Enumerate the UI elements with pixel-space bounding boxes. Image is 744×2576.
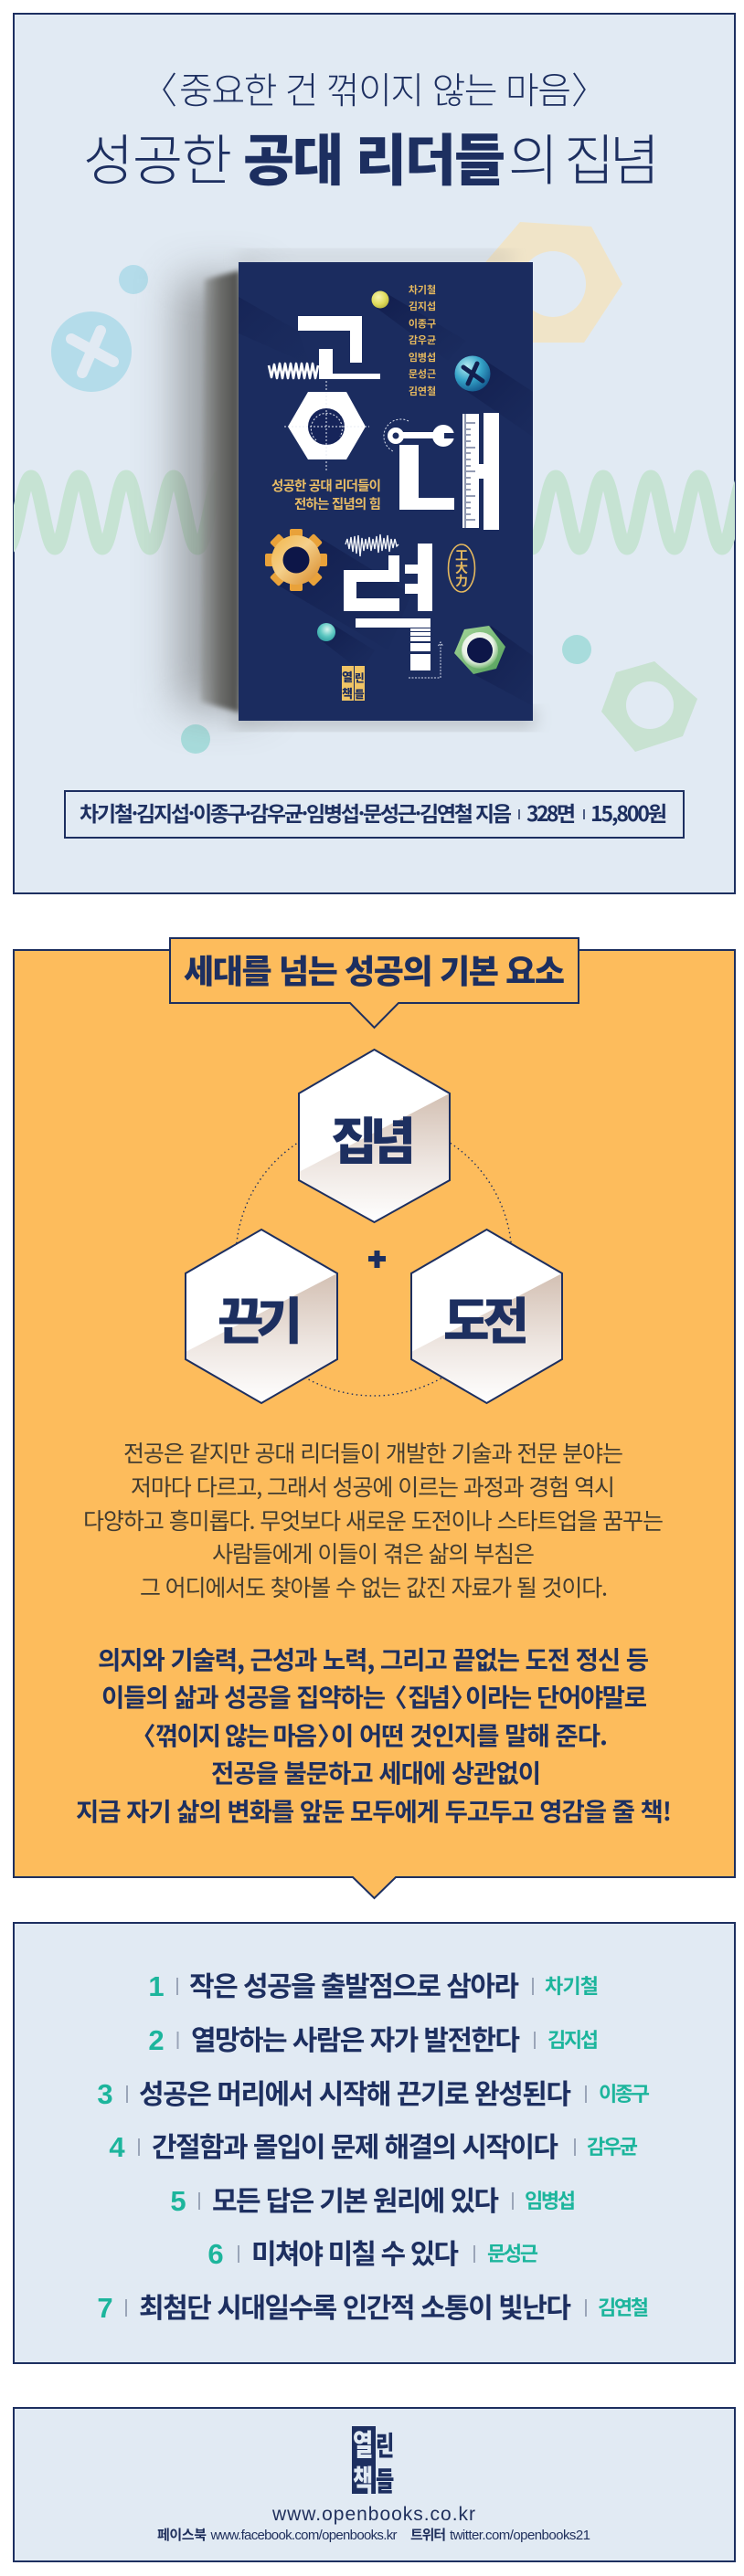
book drop shadow xyxy=(178,251,535,728)
heading callout: 세대를 넘는 성공의 기본 요소 xyxy=(184,945,565,993)
list titles: 최첨단 시대일수록 인간적 소통이 빛난다 xyxy=(139,2286,571,2326)
oval stamp: 力 xyxy=(455,572,468,590)
body text: 다양하고 흥미롭다. 무엇보다 새로운 도전이나 스타트업을 꿈꾸는 xyxy=(83,1504,664,1536)
list numbers: 7 xyxy=(97,2292,113,2324)
emphasised text: 〉 xyxy=(451,1677,475,1714)
oval stamp: 工 xyxy=(455,546,468,565)
list numbers: 3 xyxy=(97,2078,113,2110)
long shadows on cover xyxy=(239,294,523,683)
publisher logo: 린 xyxy=(376,2424,394,2464)
body text: 전공은 같지만 공대 리더들이 개발한 기술과 전문 분야는 xyxy=(123,1436,623,1469)
emphasised text: 이 어떤 것인지를 말해 준다. xyxy=(331,1716,608,1752)
nut guide lines xyxy=(284,381,369,472)
hexagon: 끈기: 끈기 xyxy=(218,1281,303,1354)
emphasised text: 지금 자기 삶의 변화를 앞둔 모두에게 두고두고 영감을 줄 책! xyxy=(76,1791,672,1828)
price and author box xyxy=(65,791,684,838)
icon: yellow sphere xyxy=(371,290,389,309)
list numbers: 2 xyxy=(148,2024,165,2056)
publisher logo on cover: 책 xyxy=(342,684,353,702)
price and author box: 328면 xyxy=(526,797,576,828)
emphasised text: 이라는 단어야말로 xyxy=(465,1677,647,1714)
cover letter: 대 with ruler xyxy=(399,413,499,530)
website: www.openbooks.co.kr xyxy=(271,2504,475,2525)
publisher logo on cover: 린 xyxy=(355,670,365,685)
emphasised text: 의지와 기술력, 근성과 노력, 그리고 끝없는 도전 정신 등 xyxy=(98,1640,649,1676)
list titles: 미쳐야 미칠 수 있다 xyxy=(251,2232,459,2272)
icon: teal sphere xyxy=(317,623,335,641)
publisher logo: 들 xyxy=(376,2460,394,2499)
title line 2: 의 집념 xyxy=(508,117,660,196)
social links: 페이스북 xyxy=(157,2525,207,2544)
social links: www.facebook.com/openbooks.kr xyxy=(210,2528,397,2543)
list numbers: 5 xyxy=(170,2185,186,2217)
hexagon: 도전 xyxy=(411,1230,562,1403)
price and author box: 15,800원 xyxy=(590,797,667,828)
list numbers: 6 xyxy=(207,2238,224,2270)
heading callout xyxy=(170,938,579,1028)
list titles: 작은 성공을 출발점으로 삼아라 xyxy=(189,1964,519,2004)
emphasised text: 이들의 삶과 성공을 집약하는 xyxy=(101,1677,386,1714)
publisher logo: 책 xyxy=(353,2458,373,2500)
icon: screw head xyxy=(455,356,490,391)
publisher logo on cover: 들 xyxy=(355,687,365,702)
list authors: 김연철 xyxy=(598,2292,649,2321)
publisher logo xyxy=(352,2423,394,2500)
list titles: 성공은 머리에서 시작해 끈기로 완성된다 xyxy=(139,2072,571,2112)
icon: green nut xyxy=(454,626,505,674)
book cover xyxy=(239,262,548,721)
panel: contents list xyxy=(14,1923,735,2363)
author names: 이종구 xyxy=(409,316,436,331)
author names: 김연철 xyxy=(409,384,436,398)
cover subtitle: 전하는 집념의 힘 xyxy=(294,494,381,513)
publisher logo on cover xyxy=(342,666,365,702)
title line 1: 〉 xyxy=(571,61,608,114)
price and author box: 차기철·김지섭·이종구·감우균·임병섭·문성근·김연철 지음 xyxy=(80,797,512,828)
emphasised text: 〈 xyxy=(131,1716,155,1752)
publisher logo: 열 xyxy=(353,2423,373,2465)
list authors: 김지섭 xyxy=(547,2024,599,2053)
hexagon: 집념: 집념 xyxy=(331,1101,416,1174)
author names: 임병섭 xyxy=(409,350,436,364)
body text: 그 어디에서도 찾아볼 수 없는 값진 자료가 될 것이다. xyxy=(140,1570,608,1603)
social links: 트위터 xyxy=(410,2525,446,2544)
list authors: 문성근 xyxy=(487,2238,538,2267)
author names: 문성근 xyxy=(409,366,436,381)
list authors xyxy=(487,1970,650,2321)
emphasised text: 〈 xyxy=(382,1677,408,1714)
title line 2 xyxy=(83,115,660,196)
plus sign xyxy=(368,1251,386,1268)
list authors: 이종구 xyxy=(599,2078,650,2107)
list authors: 차기철 xyxy=(545,1970,599,2000)
emphasised text: 〉 xyxy=(317,1716,342,1752)
dotted ring xyxy=(236,1120,512,1396)
emphasised text: 집념 xyxy=(408,1677,451,1714)
sound wave xyxy=(345,534,399,556)
list titles: 간절함과 몰입이 문제 해결의 시작이다 xyxy=(152,2125,558,2165)
emphasised text: 전공을 불문하고 세대에 상관없이 xyxy=(211,1753,541,1789)
title line 1: 〈 xyxy=(141,61,177,114)
panel: book introduction xyxy=(7,14,744,893)
list authors: 감우균 xyxy=(587,2131,638,2160)
body text: 사람들에게 이들이 겪은 삶의 부침은 xyxy=(212,1536,535,1569)
panel: basic elements of success xyxy=(14,938,735,1898)
emphasised text: 꺾이지 않는 마음 xyxy=(155,1716,317,1752)
body text xyxy=(83,1436,664,1603)
hexagon: 도전: 도전 xyxy=(443,1281,529,1354)
icon: gear xyxy=(265,529,327,591)
cover subtitle xyxy=(271,476,381,513)
author names: 김지섭 xyxy=(409,299,436,313)
list authors: 임병섭 xyxy=(525,2185,576,2214)
list titles xyxy=(139,1964,571,2326)
list titles: 열망하는 사람은 자가 발전한다 xyxy=(191,2018,520,2058)
dashed arrow xyxy=(409,642,442,678)
social links xyxy=(157,2525,590,2544)
cover letter: 덕 xyxy=(344,544,432,670)
list titles: 모든 답은 기본 원리에 있다 xyxy=(212,2179,499,2219)
author names: 감우균 xyxy=(409,333,436,347)
list numbers: 1 xyxy=(148,1970,165,2002)
oval stamp xyxy=(448,544,475,592)
author names: 차기철 xyxy=(409,282,436,297)
body text: 저마다 다르고, 그래서 성공에 이르는 과정과 경험 역시 xyxy=(131,1470,615,1503)
author names xyxy=(409,282,436,398)
emphasised text xyxy=(76,1640,672,1828)
panel: publisher footer xyxy=(14,2408,735,2561)
hexagon: 끈기 xyxy=(186,1230,337,1403)
cover subtitle: 성공한 공대 리더들이 xyxy=(271,476,381,495)
list numbers xyxy=(97,1970,224,2324)
title line 2: 공대 리더들 xyxy=(243,115,505,196)
cover letter: 공 xyxy=(269,316,380,459)
hexagon: 집념 xyxy=(299,1050,450,1222)
title line 1: 중요한 건 꺾이지 않는 마음 xyxy=(179,61,571,114)
title line 2: 성공한 xyxy=(83,117,232,196)
oval stamp: 大 xyxy=(455,559,468,577)
list numbers: 4 xyxy=(109,2131,125,2163)
social links: twitter.com/openbooks21 xyxy=(450,2528,590,2543)
background decoration shapes xyxy=(7,222,744,754)
icon: wrench xyxy=(384,419,455,451)
publisher logo on cover: 열 xyxy=(342,668,353,685)
